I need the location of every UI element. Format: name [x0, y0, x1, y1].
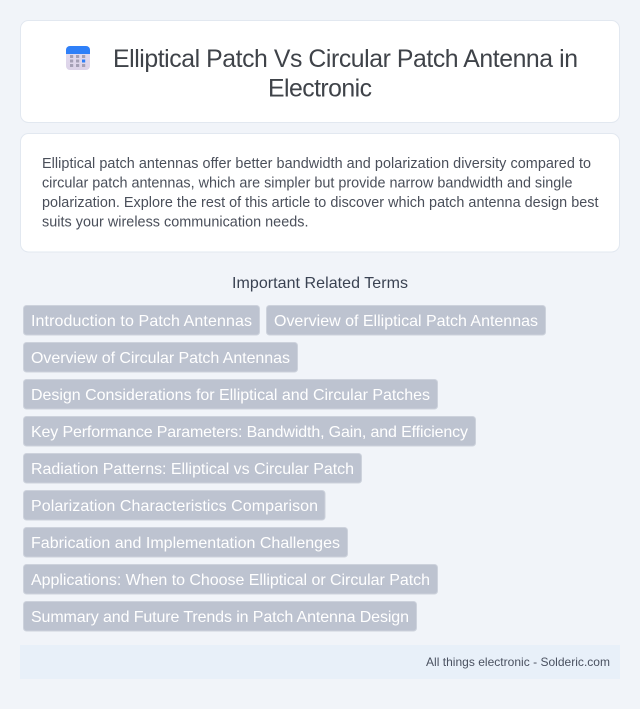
text block: summary paragraph: suits your wireless communication needs.	[42, 214, 308, 230]
tag: polarization: Polarization Characteristics Comparison	[31, 498, 318, 515]
tag list	[24, 306, 546, 631]
tag: fabrication: Fabrication and Implementation Challenges	[31, 535, 340, 552]
tag: radiation patterns: Radiation Patterns: Elliptical vs Circular Patch	[31, 461, 354, 478]
text block: summary paragraph: Elliptical patch antennas offer better bandwidth and polarization diversity compared to	[42, 156, 591, 172]
panel: summary	[20, 134, 620, 252]
tag: applications: Applications: When to Choose Elliptical or Circular Patch	[31, 572, 430, 589]
tag: applications	[24, 564, 438, 594]
footer: All things electronic - Solderic.com	[426, 655, 610, 669]
text block: summary paragraph: circular patch antennas, which are simpler but provide narrow bandwidth and single	[42, 176, 572, 192]
text block: summary paragraph: polarization. Explore the rest of this article to discover which patch antenna design best	[42, 195, 598, 211]
tag: key performance parameters: Key Performance Parameters: Bandwidth, Gain, and Efficiency	[31, 424, 468, 441]
title: Electronic	[268, 76, 372, 102]
tag: design considerations: Design Considerations for Elliptical and Circular Patches	[31, 387, 430, 404]
tag: design considerations	[24, 380, 438, 409]
tag: fabrication	[24, 528, 348, 557]
tag: radiation patterns	[24, 454, 362, 483]
tag: elliptical overview	[266, 306, 546, 335]
tag: polarization	[24, 490, 325, 520]
heading: important related terms: Important Related Terms	[232, 275, 408, 292]
title	[113, 46, 578, 102]
tag: introduction	[24, 306, 260, 335]
tag: summary and future trends	[24, 602, 416, 631]
tag: summary and future trends: Summary and Future Trends in Patch Antenna Design	[31, 609, 409, 626]
tag: key performance parameters	[24, 416, 476, 446]
title: Elliptical Patch Vs Circular Patch Antenna in	[113, 46, 578, 73]
tag: introduction: Introduction to Patch Antennas	[31, 313, 252, 330]
footer	[20, 645, 620, 679]
panel: title card	[20, 20, 620, 122]
tag: elliptical overview: Overview of Elliptical Patch Antennas	[274, 313, 538, 330]
tag: circular overview: Overview of Circular Patch Antennas	[31, 350, 290, 367]
tag: circular overview	[24, 342, 298, 372]
text block: summary paragraph	[42, 156, 598, 230]
icon: calendar	[66, 46, 90, 70]
